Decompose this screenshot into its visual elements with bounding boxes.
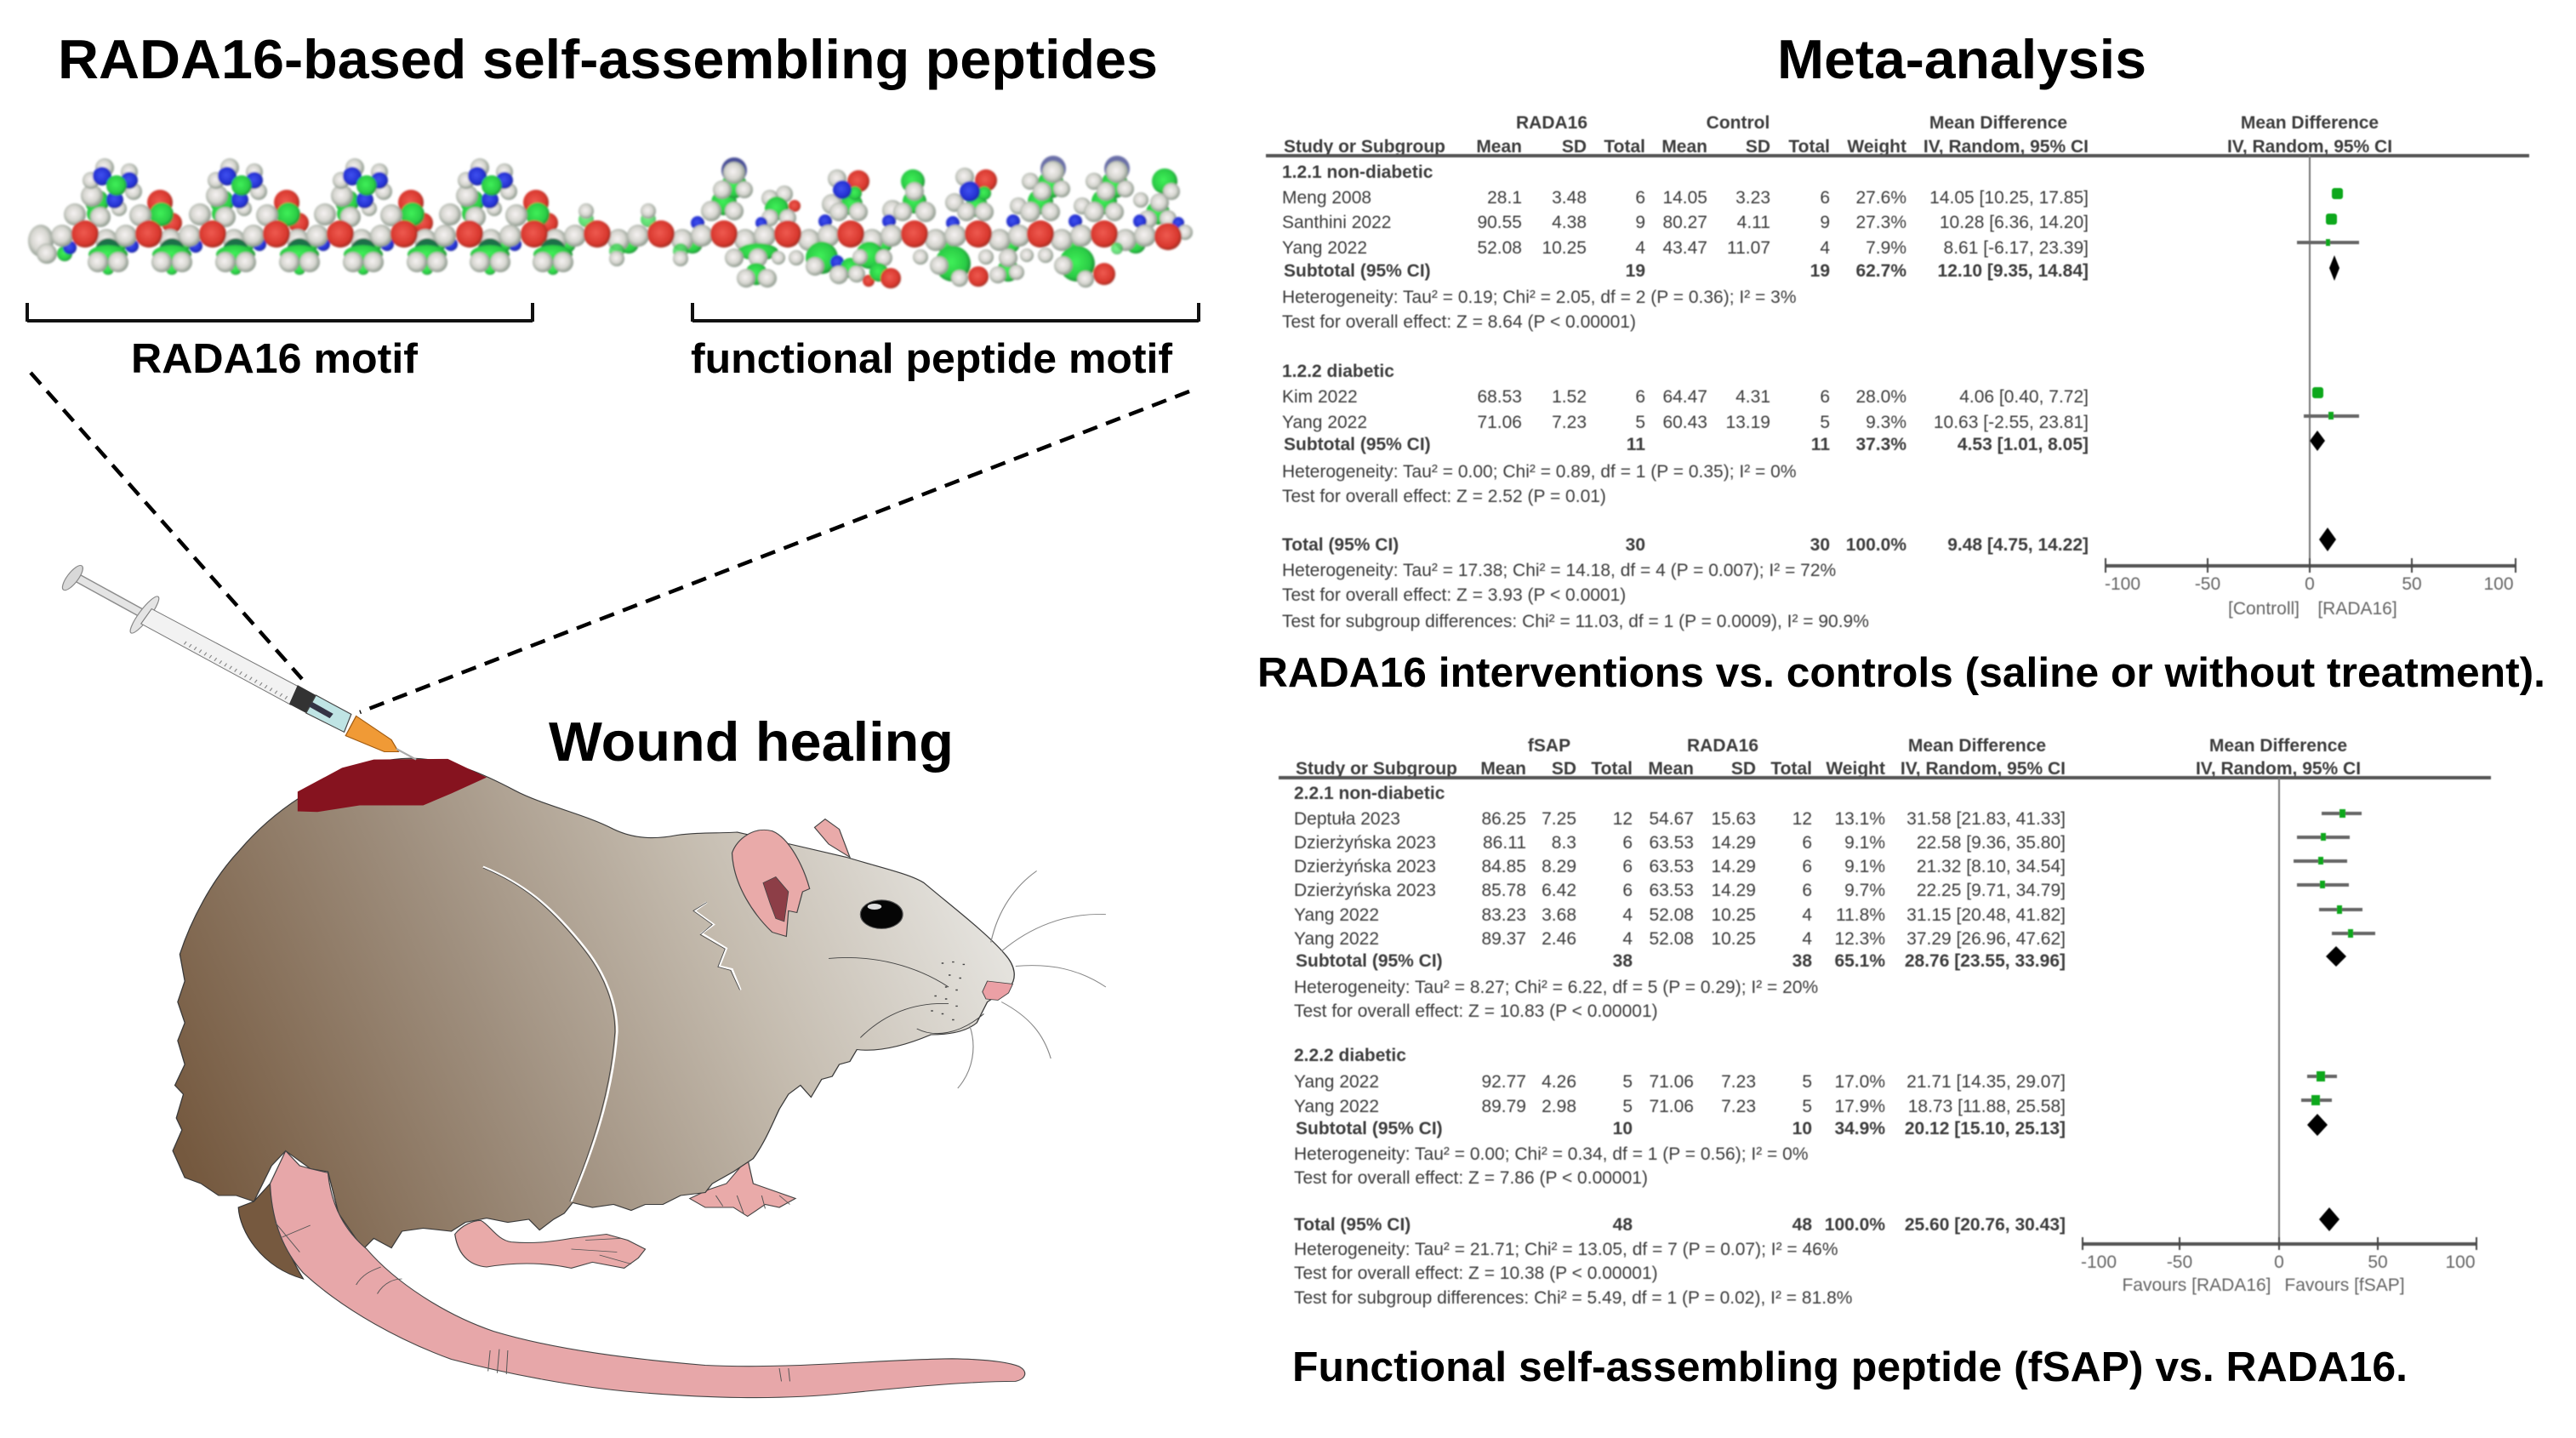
hub detail (311, 705, 332, 716)
study rows: 80.27 (1662, 213, 1707, 232)
study rows: 6.42 (1542, 881, 1576, 900)
header: SD (1746, 137, 1770, 157)
axis: Favours [fSAP] (2284, 1275, 2405, 1295)
bracket: functional peptide motif (692, 303, 1199, 322)
study rows: 100.0% (1846, 535, 1906, 555)
axis: 50 (2402, 574, 2422, 594)
study rows: 37.3% (1855, 435, 1906, 454)
study rows: 4 (1622, 905, 1633, 925)
study rows: 6 (1802, 857, 1812, 876)
axis: [Controll] (2228, 599, 2300, 619)
header: Mean (1480, 759, 1526, 779)
study rows: 8.29 (1542, 857, 1576, 876)
study rows: 14.05 (1662, 188, 1707, 208)
study rows: 21.32 [8.10, 34.54] (1917, 857, 2066, 876)
study rows: 89.37 (1481, 929, 1526, 949)
front ear (732, 830, 810, 936)
header: Mean (1648, 759, 1694, 779)
shoulder fold (483, 867, 617, 1201)
back ear (814, 819, 850, 857)
study rows: 11.07 (1727, 238, 1770, 258)
study rows: 48 (1792, 1215, 1812, 1235)
study rows: 86.11 (1483, 833, 1526, 853)
header: IV, Random, 95% CI (2196, 759, 2361, 779)
study rows: 62.7% (1855, 261, 1906, 281)
forest markers (2279, 778, 2375, 1244)
study rows: 28.1 (1487, 188, 1522, 208)
scale marks (185, 642, 289, 699)
study rows: 48 (1613, 1215, 1633, 1235)
caption: RADA16 interventions vs controls: RADA16 interventions vs. controls (saline or without treatment). (1257, 650, 2545, 696)
study rows: Subtotal (95% CI) (1296, 1119, 1443, 1138)
study rows: 28.76 [23.55, 33.96] (1905, 951, 2066, 971)
study rows: 19 (1810, 261, 1830, 281)
study rows: 4.38 (1552, 213, 1587, 232)
study rows: 14.05 [10.25, 17.85] (1929, 188, 2089, 208)
nose and mouth (983, 981, 1012, 1000)
backbone blue atoms (125, 214, 1147, 253)
study rows: Subtotal (95% CI) (1296, 951, 1443, 971)
study rows: 8.61 [-6.17, 23.39] (1944, 238, 2089, 258)
study rows: 10.25 (1711, 929, 1756, 949)
study rows: 9 (1635, 213, 1645, 232)
study rows: Test for overall effect: Z = 10.83 (P < 0.00001) (1294, 1001, 1658, 1021)
paw toes (571, 1195, 789, 1264)
study rows: 8.3 (1552, 833, 1576, 853)
study rows: Test for subgroup differences: Chi² = 11.03, df = 1 (P = 0.0009), I² = 90.9% (1282, 612, 1869, 631)
study rows: 4 (1820, 238, 1830, 258)
study rows: 7.25 (1542, 809, 1576, 829)
study rows: Yang 2022 (1282, 413, 1367, 432)
study rows: Test for overall effect: Z = 2.52 (P = 0.01) (1282, 487, 1606, 506)
study rows: 4 (1635, 238, 1645, 258)
fluid hub (306, 695, 351, 732)
study rows: 12 (1613, 809, 1633, 829)
study rows: 15.63 (1711, 809, 1756, 829)
study rows: 6 (1635, 387, 1645, 407)
header: IV, Random, 95% CI (1901, 759, 2066, 779)
study rows: 2.2.1 non-diabetic (1294, 784, 1445, 803)
study rows: 5 (1635, 413, 1645, 432)
study rows: 6 (1635, 188, 1645, 208)
study rows: 37.29 [26.96, 47.62] (1906, 929, 2066, 949)
header: IV, Random, 95% CI (2227, 137, 2392, 157)
study rows: 10.28 [6.36, 14.20] (1940, 213, 2089, 232)
study rows: 10 (1613, 1119, 1633, 1138)
study rows: 85.78 (1481, 881, 1526, 900)
study rows: 63.53 (1649, 881, 1694, 900)
study rows: Kim 2022 (1282, 387, 1358, 407)
study rows: 52.08 (1649, 905, 1694, 925)
study rows: 6 (1802, 881, 1812, 900)
study rows: 3.48 (1552, 188, 1587, 208)
study rows: 52.08 (1649, 929, 1694, 949)
study rows: 10.63 [-2.55, 23.81] (1934, 413, 2089, 432)
study rows: 1.2.2 diabetic (1282, 362, 1394, 381)
axis: 100 (2445, 1253, 2476, 1272)
study rows: 1.52 (1552, 387, 1587, 407)
study rows: 22.58 [9.36, 35.80] (1917, 833, 2066, 853)
study rows: Heterogeneity: Tau² = 0.00; Chi² = 0.34, df = 1 (P = 0.56); I² = 0% (1294, 1144, 1809, 1164)
dashed zoom lines from syringe to peptide (31, 373, 1189, 712)
study rows: 5 (1802, 1097, 1812, 1116)
study rows: 71.06 (1649, 1072, 1694, 1092)
header: Total (1604, 137, 1645, 157)
whiskers (958, 871, 1106, 1088)
front foot (690, 1159, 795, 1217)
header: RADA16 (1687, 736, 1758, 756)
study rows: Test for overall effect: Z = 7.86 (P < 0.00001) (1294, 1168, 1648, 1188)
study rows: 63.53 (1649, 857, 1694, 876)
study rows: 54.67 (1649, 809, 1694, 829)
functional motif upper side chains (701, 156, 1193, 240)
header: Mean Difference (1908, 736, 2046, 756)
study rows: 7.9% (1866, 238, 1906, 258)
axis: 50 (2368, 1253, 2388, 1272)
study rows: 4.31 (1735, 387, 1770, 407)
study rows: 21.71 [14.35, 29.07] (1906, 1072, 2066, 1092)
header: RADA16 (1516, 113, 1587, 133)
header: Mean (1476, 137, 1522, 157)
header: Control (1707, 113, 1770, 133)
study rows: 14.29 (1711, 881, 1756, 900)
study rows (1294, 784, 2066, 1308)
study rows: 6 (1820, 387, 1830, 407)
study rows: 13.19 (1725, 413, 1770, 432)
study rows: 4.26 (1542, 1072, 1576, 1092)
study rows: 11 (1811, 435, 1830, 454)
axis: -50 (2167, 1253, 2192, 1272)
study rows: 4.11 (1737, 213, 1770, 232)
study rows: 4 (1622, 929, 1633, 949)
hind foot (455, 1220, 646, 1268)
eye (860, 900, 903, 928)
study rows: 22.25 [9.71, 34.79] (1917, 881, 2066, 900)
study rows: 18.73 [11.88, 25.58] (1908, 1097, 2066, 1116)
label: functional peptide motif: functional peptide motif (691, 336, 1173, 382)
axis: 100 (2483, 574, 2514, 594)
header: Weight (1847, 137, 1906, 157)
label: Wound healing: Wound healing (549, 710, 954, 773)
whisker dots (931, 962, 965, 1019)
study rows: 30 (1626, 535, 1645, 555)
inner ear (763, 876, 789, 922)
study rows: Subtotal (95% CI) (1284, 261, 1431, 281)
tail base wedge (238, 1184, 303, 1279)
study rows: Santhini 2022 (1282, 213, 1391, 232)
study rows: Heterogeneity: Tau² = 21.71; Chi² = 13.05, df = 7 (P = 0.07); I² = 46% (1294, 1240, 1838, 1259)
study rows: 92.77 (1481, 1072, 1526, 1092)
study rows: 38 (1792, 951, 1812, 971)
study rows: 5 (1622, 1072, 1633, 1092)
study rows: 28.0% (1855, 387, 1906, 407)
tail (271, 1150, 1025, 1398)
study rows: 5 (1622, 1097, 1633, 1116)
study rows: 10.25 (1542, 238, 1587, 258)
functional motif lower side chains (725, 242, 1123, 288)
study rows: 89.79 (1481, 1097, 1526, 1116)
study rows: 65.1% (1834, 951, 1885, 971)
study rows: 11.8% (1836, 905, 1885, 925)
study rows: Test for overall effect: Z = 10.38 (P < 0.00001) (1294, 1264, 1658, 1283)
study rows: 6 (1622, 833, 1633, 853)
study rows: 17.9% (1834, 1097, 1885, 1116)
header: SD (1552, 759, 1576, 779)
study rows: 86.25 (1481, 809, 1526, 829)
study rows: 10.25 (1711, 905, 1756, 925)
axis (2081, 1237, 2477, 1295)
forest markers (2297, 156, 2359, 566)
study rows: 4 (1802, 905, 1812, 925)
plunger rod (74, 576, 145, 614)
tail rings (275, 1222, 789, 1381)
bracket: RADA16 motif (27, 303, 533, 322)
study rows: 5 (1820, 413, 1830, 432)
study rows: 31.15 [20.48, 41.82] (1906, 905, 2066, 925)
study rows: 52.08 (1477, 238, 1522, 258)
study rows: Test for overall effect: Z = 8.64 (P < 0.00001) (1282, 312, 1636, 332)
study rows: Total (95% CI) (1282, 535, 1399, 555)
header: Mean Difference (1929, 113, 2067, 133)
study rows: 10 (1792, 1119, 1812, 1138)
study rows: Heterogeneity: Tau² = 0.00; Chi² = 0.89, df = 1 (P = 0.35); I² = 0% (1282, 462, 1797, 482)
study rows: 9.3% (1866, 413, 1906, 432)
study rows: 9.1% (1844, 857, 1885, 876)
header: SD (1731, 759, 1756, 779)
study rows: 2.98 (1542, 1097, 1576, 1116)
eye highlight (868, 904, 881, 910)
study rows: 14.29 (1711, 857, 1756, 876)
axis: Favours [RADA16] (2122, 1275, 2271, 1295)
rat body (173, 758, 1014, 1249)
plunger head (59, 563, 87, 592)
study rows: 31.58 [21.83, 41.33] (1906, 809, 2066, 829)
study rows: Yang 2022 (1294, 1072, 1379, 1092)
axis: -50 (2195, 574, 2220, 594)
forest plot: RADA16 vs controls (1266, 113, 2529, 631)
study rows: 12.3% (1834, 929, 1885, 949)
study rows: 3.68 (1542, 905, 1576, 925)
study rows: Yang 2022 (1294, 1097, 1379, 1116)
study rows: 7.23 (1721, 1097, 1756, 1116)
study rows: 20.12 [15.10, 25.13] (1905, 1119, 2066, 1138)
study rows: 71.06 (1477, 413, 1522, 432)
forest plot: fSAP vs RADA16 (1279, 736, 2491, 1308)
study rows: 6 (1802, 833, 1812, 853)
study rows: 4.06 [0.40, 7.72] (1959, 387, 2089, 407)
study rows: 11 (1627, 435, 1645, 454)
study rows: Test for subgroup differences: Chi² = 5.49, df = 1 (P = 0.02), I² = 81.8% (1294, 1288, 1852, 1308)
header: Total (1591, 759, 1633, 779)
axis: -100 (2105, 574, 2140, 594)
study rows: Heterogeneity: Tau² = 0.19; Chi² = 2.05, df = 2 (P = 0.36); I² = 3% (1282, 288, 1797, 307)
study rows: 2.46 (1542, 929, 1576, 949)
study rows: 13.1% (1834, 809, 1885, 829)
header: Weight (1826, 759, 1885, 779)
caption: fSAP vs RADA16: Functional self-assembling peptide (fSAP) vs. RADA16. (1292, 1344, 2408, 1390)
study rows: Meng 2008 (1282, 188, 1371, 208)
study rows: Heterogeneity: Tau² = 8.27; Chi² = 6.22, df = 5 (P = 0.29); I² = 20% (1294, 978, 1818, 997)
study rows: Test for overall effect: Z = 3.93 (P < 0.0001) (1282, 585, 1626, 605)
header: Mean (1661, 137, 1707, 157)
study rows: 7.23 (1721, 1072, 1756, 1092)
backbone units (71, 220, 1182, 254)
study rows: 1.2.1 non-diabetic (1282, 163, 1433, 182)
finger flange (127, 594, 162, 636)
study rows: 34.9% (1834, 1119, 1885, 1138)
chain end (28, 225, 77, 264)
axis: [RADA16] (2317, 599, 2397, 619)
study rows: 7.23 (1552, 413, 1587, 432)
study rows: 64.47 (1662, 387, 1707, 407)
study rows: 9.1% (1844, 833, 1885, 853)
study rows: 84.85 (1481, 857, 1526, 876)
header: Study or Subgroup (1284, 137, 1445, 157)
study rows: 9.48 [4.75, 14.22] (1947, 535, 2089, 555)
study rows: 4 (1802, 929, 1812, 949)
face lines (829, 957, 983, 1038)
axis: 0 (2274, 1253, 2284, 1272)
label: RADA16 motif: RADA16 motif (131, 336, 419, 382)
study rows: 2.2.2 diabetic (1294, 1046, 1406, 1065)
title: RADA16-based self-assembling peptides: RADA16-based self-assembling peptides (58, 28, 1158, 90)
study rows: Yang 2022 (1294, 929, 1379, 949)
study rows: 19 (1626, 261, 1645, 281)
study rows: 68.53 (1477, 387, 1522, 407)
barrel (141, 609, 301, 705)
RADA16 lower side chains (88, 238, 688, 275)
study rows: 9 (1820, 213, 1830, 232)
study rows: 30 (1810, 535, 1830, 555)
axis: -100 (2081, 1253, 2117, 1272)
title: Meta-analysis: Meta-analysis (1777, 28, 2146, 90)
header: Total (1788, 137, 1830, 157)
study rows: Dzierżyńska 2023 (1294, 857, 1436, 876)
study rows: 43.47 (1662, 238, 1707, 258)
study rows: 6 (1622, 881, 1633, 900)
header: IV, Random, 95% CI (1923, 137, 2089, 157)
shoulder fold outline (483, 868, 615, 1201)
study rows: 38 (1613, 951, 1633, 971)
study rows: 5 (1802, 1072, 1812, 1092)
header (1296, 736, 2361, 779)
axis: 0 (2305, 574, 2315, 594)
study rows: Total (95% CI) (1294, 1215, 1411, 1235)
study rows: 6 (1820, 188, 1830, 208)
neck fur outline (693, 903, 740, 990)
axis (2105, 558, 2516, 619)
study rows: 14.29 (1711, 833, 1756, 853)
study rows: 27.6% (1855, 188, 1906, 208)
study rows: 60.43 (1662, 413, 1707, 432)
study rows: 83.23 (1481, 905, 1526, 925)
molecular model of peptide chain (28, 156, 1193, 288)
wound (298, 759, 487, 812)
neck fur lines (695, 903, 740, 990)
study rows: 17.0% (1834, 1072, 1885, 1092)
orange needle hub (345, 716, 398, 752)
rubber stopper (289, 685, 316, 713)
study rows: 71.06 (1649, 1097, 1694, 1116)
header: Mean Difference (2209, 736, 2347, 756)
header: Study or Subgroup (1296, 759, 1457, 779)
study rows: 27.3% (1855, 213, 1906, 232)
study rows (1282, 163, 2089, 631)
study rows: 6 (1622, 857, 1633, 876)
header: Total (1770, 759, 1812, 779)
needle (396, 749, 416, 760)
study rows: Heterogeneity: Tau² = 17.38; Chi² = 14.18, df = 4 (P = 0.007); I² = 72% (1282, 561, 1836, 580)
study rows: 90.55 (1477, 213, 1522, 232)
study rows: Subtotal (95% CI) (1284, 435, 1431, 454)
header: SD (1562, 137, 1587, 157)
study rows: Dzierżyńska 2023 (1294, 833, 1436, 853)
header: fSAP (1528, 736, 1570, 756)
study rows: 9.7% (1844, 881, 1885, 900)
study rows: Deptuła 2023 (1294, 809, 1400, 829)
study rows: 12.10 [9.35, 14.84] (1938, 261, 2089, 281)
study rows: Yang 2022 (1282, 238, 1367, 258)
study rows: 4.53 [1.01, 8.05] (1958, 435, 2089, 454)
study rows: Dzierżyńska 2023 (1294, 881, 1436, 900)
study rows: 100.0% (1825, 1215, 1885, 1235)
illustration: rat with wound and syringe (59, 563, 1106, 1398)
study rows: 3.23 (1735, 188, 1770, 208)
study rows: 25.60 [20.76, 30.43] (1905, 1215, 2066, 1235)
syringe (59, 563, 416, 760)
study rows: 12 (1792, 809, 1812, 829)
study rows: Yang 2022 (1294, 905, 1379, 925)
header (1284, 113, 2392, 157)
plunger rod light (74, 576, 145, 614)
study rows: 63.53 (1649, 833, 1694, 853)
header: Mean Difference (2241, 113, 2379, 133)
